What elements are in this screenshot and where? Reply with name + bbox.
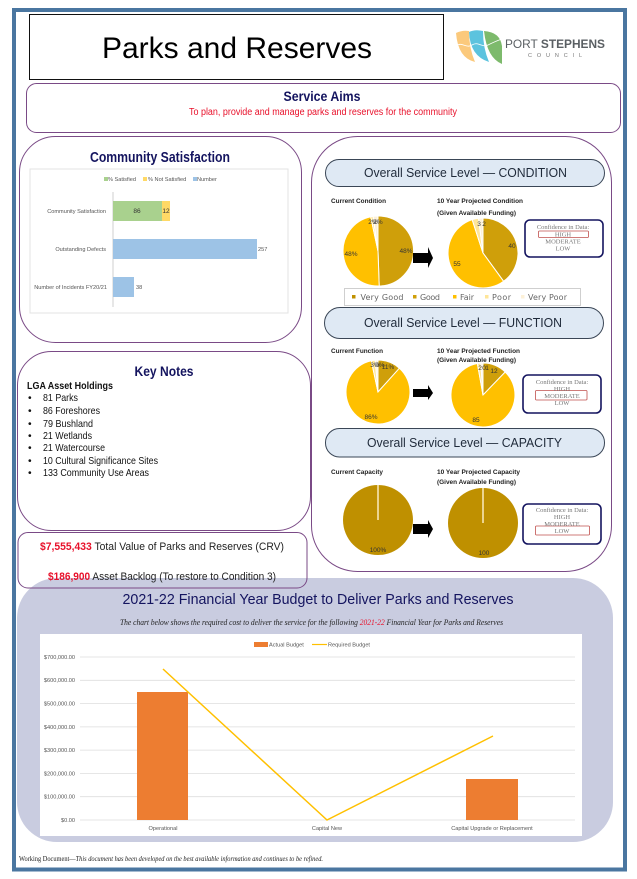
title — [30, 14, 444, 80]
combo chart: actual vs required budget — [40, 634, 582, 836]
budget description: The chart below shows the required cost to deliver the service for the following 2021-22 Financial Year for Parks and Reserves — [120, 618, 503, 627]
confidence box: function: LOW — [555, 400, 570, 407]
logo: Port Stephens Council — [456, 30, 605, 64]
combo chart: actual vs required budget: Capital Upgrade or Replacement — [451, 826, 533, 832]
chart heading: projected capacity: 10 Year Projected Capacity — [437, 469, 520, 476]
legend: condition ratings: Good — [420, 293, 440, 302]
asset holdings list: 21 Watercourse — [43, 443, 105, 454]
asset holdings list: 81 Parks — [43, 393, 78, 404]
panel: service aims — [26, 84, 620, 132]
asset holdings list: 86 Foreshores — [43, 406, 100, 417]
asset backlog: $186,900 Asset Backlog (To restore to Condition 3) — [48, 571, 276, 583]
pie: current function: 11% — [382, 364, 394, 371]
pie: projected condition: 2 — [482, 221, 486, 228]
pie: current condition: 48% — [344, 251, 358, 258]
banner: function — [324, 308, 604, 338]
bar chart: satisfaction: Number — [197, 177, 217, 183]
chart heading: projected function: (Given Available Funding) — [437, 357, 516, 364]
confidence box: function — [523, 375, 601, 413]
confidence box: capacity: Confidence in Data: — [536, 507, 588, 514]
confidence box: capacity: LOW — [555, 528, 570, 535]
bar chart: satisfaction: 86 — [133, 208, 141, 215]
asset holdings list: • — [28, 431, 32, 442]
confidence box: capacity: MODERATE — [544, 521, 580, 528]
combo chart: actual vs required budget: Required Budget — [328, 642, 370, 648]
pie: projected function: 2 — [478, 365, 482, 372]
banner: capacity — [326, 428, 604, 457]
confidence box: condition: MODERATE — [545, 238, 581, 246]
asset holdings list — [27, 381, 158, 479]
combo chart: actual vs required budget: $200,000.00 — [44, 772, 75, 778]
bar chart: satisfaction: 257 — [258, 247, 267, 253]
logo: Port Stephens Council: PORT STEPHENS — [505, 37, 605, 51]
chart heading: projected function: 10 Year Projected Function — [437, 348, 520, 355]
combo chart: actual vs required budget: $300,000.00 — [44, 748, 75, 754]
pie: projected capacity — [448, 488, 518, 558]
legend: condition ratings: Very Good — [360, 293, 404, 302]
asset holdings list: • — [28, 468, 32, 479]
combo chart: actual vs required budget: $700,000.00 — [44, 655, 75, 661]
heading: service aims: Service Aims — [284, 88, 361, 104]
pie: projected function — [451, 363, 515, 427]
panel: community satisfaction — [20, 136, 302, 342]
pie: projected condition: 3 — [477, 221, 481, 228]
panel: overall service level — [312, 136, 612, 572]
footer note: Working Document—This document has been developed on the best available information and continues to be refined. — [19, 854, 323, 863]
pie: projected condition — [448, 218, 518, 288]
panel: asset value — [18, 532, 307, 588]
pie: projected function: 85 — [472, 417, 480, 424]
combo chart: actual vs required budget: Capital New — [312, 826, 343, 832]
logo: Port Stephens Council: COUNCIL — [528, 53, 582, 59]
asset holdings list: 10 Cultural Significance Sites — [43, 456, 158, 467]
asset holdings list: LGA Asset Holdings — [27, 381, 113, 392]
chart heading: projected condition: 10 Year Projected Condition — [437, 198, 523, 205]
banner: condition: Overall Service Level — CONDITION — [364, 166, 567, 180]
legend: condition ratings: Fair — [460, 293, 475, 302]
bar chart: satisfaction: % Satisfied — [108, 177, 136, 183]
combo chart: actual vs required budget: Operational — [149, 826, 177, 832]
chart heading: projected condition: (Given Available Funding) — [437, 210, 516, 217]
pie: current condition — [343, 216, 414, 286]
confidence box: function: MODERATE — [544, 393, 580, 400]
asset holdings list: • — [28, 406, 32, 417]
pie: current condition: 2% — [368, 219, 378, 226]
banner: function: Overall Service Level — FUNCTION — [364, 316, 562, 330]
chart heading: current capacity: Current Capacity — [331, 469, 383, 476]
bar chart: satisfaction: 12 — [162, 208, 170, 215]
bar chart: satisfaction: % Not Satisfied — [148, 177, 186, 183]
confidence box: function: Confidence in Data: — [536, 379, 588, 386]
confidence box: condition: HIGH — [555, 232, 571, 238]
asset holdings list: 79 Bushland — [43, 419, 93, 430]
confidence box: condition: Confidence in Data: — [537, 224, 589, 231]
combo chart: actual vs required budget: Actual Budget — [269, 642, 304, 648]
confidence box: capacity: HIGH — [554, 514, 570, 521]
service aims text: To plan, provide and manage parks and reserves for the community — [189, 107, 457, 118]
banner: capacity: Overall Service Level — CAPACITY — [367, 436, 563, 450]
pie: current capacity — [343, 485, 413, 555]
asset holdings list: • — [28, 419, 32, 430]
pie: projected function: 0 — [482, 365, 486, 372]
asset holdings list: • — [28, 443, 32, 454]
combo chart: actual vs required budget: $400,000.00 — [44, 725, 75, 731]
asset holdings list: 133 Community Use Areas — [43, 468, 149, 479]
pie: current capacity: 100% — [370, 547, 387, 554]
pie: current function: 3% — [370, 362, 380, 369]
combo chart: actual vs required budget: $0.00 — [61, 818, 75, 824]
combo chart: actual vs required budget: $500,000.00 — [44, 702, 75, 708]
arrow — [413, 247, 433, 268]
legend: condition ratings: Very Poor — [528, 293, 568, 302]
pie: projected capacity: 100 — [479, 550, 490, 557]
heading: key notes: Key Notes — [134, 363, 194, 379]
bar chart: satisfaction: 38 — [136, 285, 142, 291]
arrow — [413, 520, 433, 538]
chart heading: current condition: Current Condition — [331, 198, 386, 205]
chart heading: projected function — [437, 348, 520, 364]
pie: current function: 86% — [364, 414, 378, 421]
panel: key notes — [18, 352, 310, 530]
pie: projected function: 12 — [490, 368, 498, 375]
confidence box: capacity — [523, 504, 601, 544]
bar chart: satisfaction — [30, 169, 288, 313]
pie: projected condition: 40 — [508, 243, 516, 250]
bar chart: satisfaction: Outstanding Defects — [55, 247, 106, 253]
asset holdings list: 21 Wetlands — [43, 431, 92, 442]
total value: $7,555,433 Total Value of Parks and Reserves (CRV) — [40, 541, 284, 553]
asset holdings list: • — [28, 456, 32, 467]
chart heading: projected capacity — [437, 469, 520, 486]
asset holdings list: • — [28, 393, 32, 404]
pie: current condition: 48% — [399, 248, 413, 255]
pie: current function: 0% — [375, 362, 385, 369]
legend: condition ratings: Poor — [492, 293, 512, 302]
confidence box: condition: LOW — [556, 246, 571, 252]
combo chart: actual vs required budget: $100,000.00 — [44, 794, 75, 800]
chart heading: current function: Current Function — [331, 348, 383, 355]
pie: projected function: 1 — [485, 365, 489, 372]
pie: projected condition: 55 — [453, 261, 461, 268]
legend: condition ratings — [344, 288, 580, 306]
chart heading: projected condition — [437, 198, 523, 217]
banner: condition — [326, 160, 604, 186]
bar chart: satisfaction: Community Satisfaction — [47, 209, 106, 215]
arrow — [413, 385, 433, 400]
pie: current function — [346, 360, 410, 424]
title: Parks and Reserves — [102, 32, 372, 65]
bar chart: satisfaction: Number of Incidents FY20/21 — [34, 285, 107, 291]
panel: budget — [17, 578, 613, 842]
combo chart: actual vs required budget: $600,000.00 — [44, 678, 75, 684]
chart heading: projected capacity: (Given Available Funding) — [437, 479, 516, 486]
pie: current condition: 2% — [373, 219, 383, 226]
heading: community satisfaction: Community Satisfaction — [90, 150, 230, 166]
heading: budget: 2021-22 Financial Year Budget to Deliver Parks and Reserves — [122, 591, 514, 608]
confidence box: function: HIGH — [554, 386, 570, 393]
confidence box: condition — [525, 220, 603, 257]
